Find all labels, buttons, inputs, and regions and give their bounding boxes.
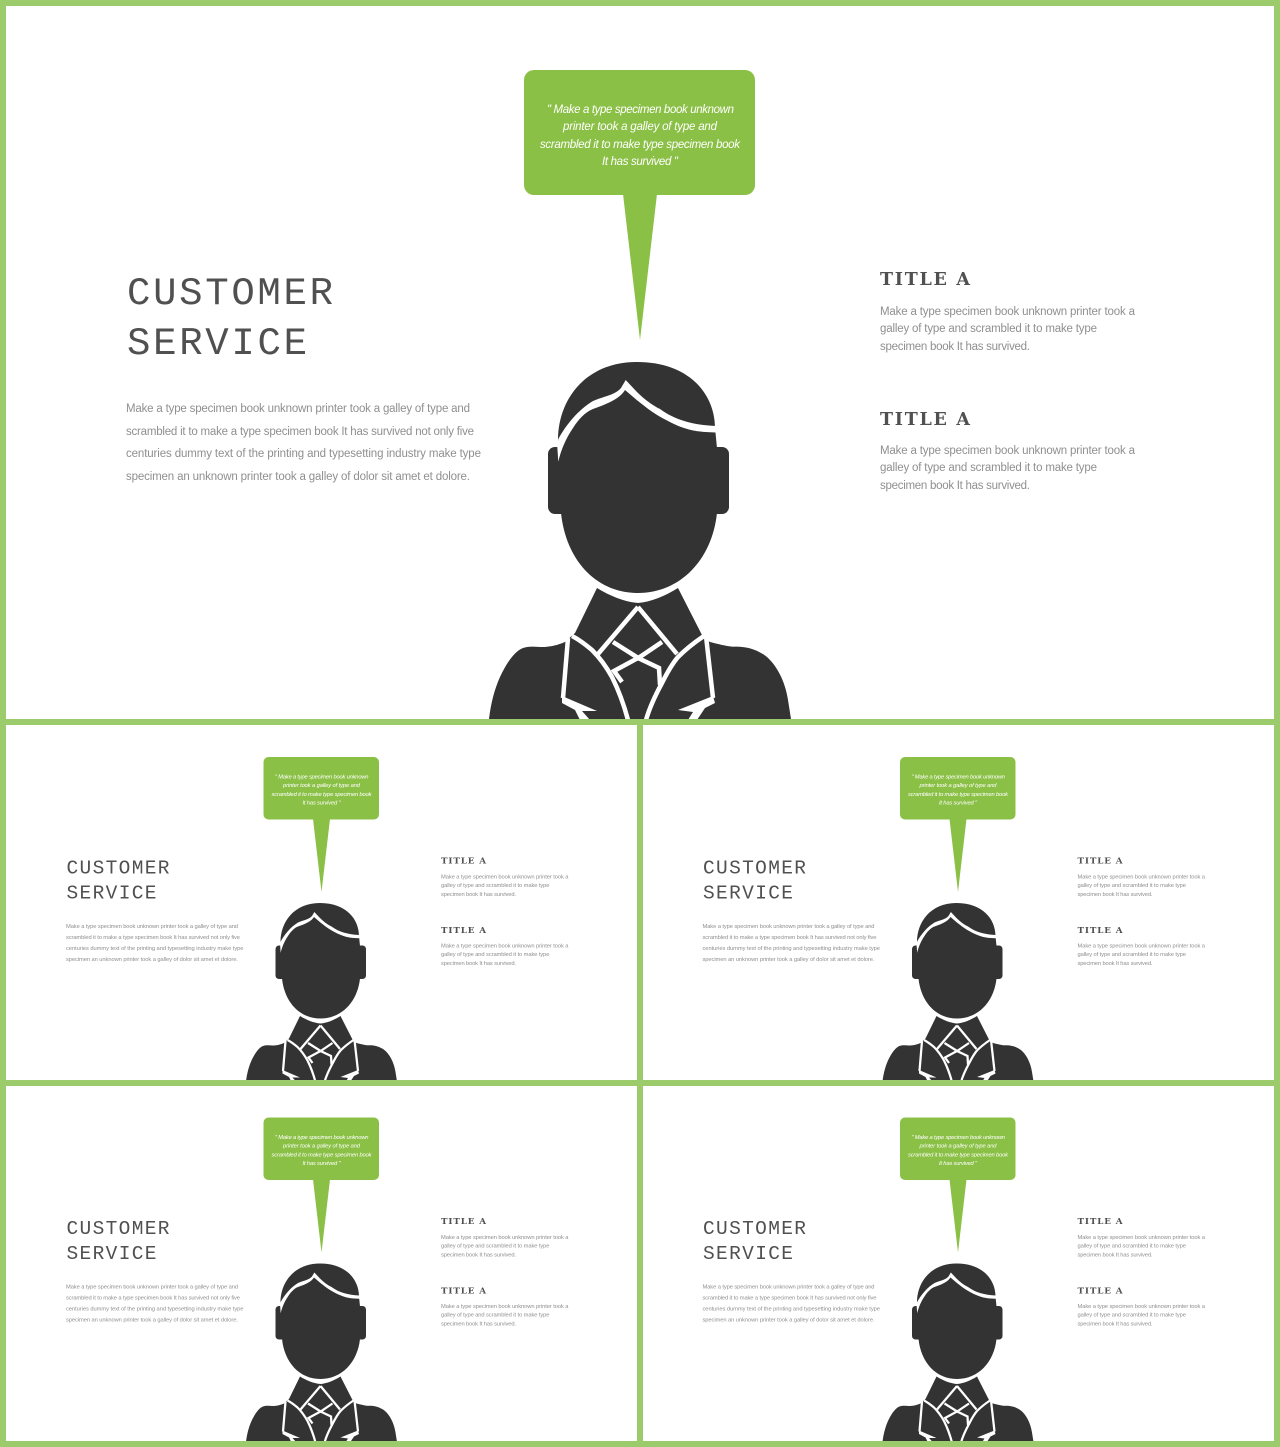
body text: scrambled it to make a type specimen book It has survived not only five	[702, 1296, 876, 1302]
text block: title A first: TITLE A	[880, 270, 970, 290]
text block: title A second: TITLE A	[1078, 1286, 1123, 1296]
text block: title A second: specimen book It has survived.	[880, 480, 1030, 492]
body text: Make a type specimen book unknown printer took a galley of type and	[702, 924, 874, 930]
text block: title A first: specimen book It has survived.	[441, 892, 516, 898]
text block: title A first: Make a type specimen book unknown printer took a	[880, 306, 1136, 318]
body text: centuries dummy text of the printing and typesetting industry make type	[702, 1306, 880, 1312]
text block: title A second: TITLE A	[880, 410, 970, 430]
text block: title A second	[441, 1286, 569, 1328]
icon: business person	[882, 1264, 1034, 1442]
body text: scrambled it to make a type specimen book It has survived not only five	[126, 426, 474, 438]
speech bubble	[900, 1118, 1016, 1252]
heading	[703, 858, 806, 904]
text block: title A second: Make a type specimen book unknown printer took a	[441, 1304, 569, 1310]
body text	[66, 1284, 244, 1324]
body text: Make a type specimen book unknown printer took a galley of type and	[702, 1284, 874, 1290]
heading: SERVICE	[703, 1243, 793, 1265]
speech bubble: " Make a type specimen book unknown	[275, 774, 368, 780]
text block: title A second	[1078, 1286, 1206, 1328]
panel: thumbnail top left	[66, 757, 569, 1082]
body text: specimen an unknown printer took a galley of dolor sit amet et dolore.	[66, 957, 238, 963]
heading: SERVICE	[703, 882, 793, 904]
heading: CUSTOMER	[66, 1218, 170, 1240]
heading	[66, 858, 170, 904]
text block: title A first: TITLE A	[441, 1217, 486, 1227]
text block: title A first: TITLE A	[1078, 856, 1123, 866]
speech bubble: printer took a galley of type and	[918, 783, 997, 789]
speech bubble: scrambled it to make type specimen book	[540, 139, 741, 151]
text block: title A second: Make a type specimen book unknown printer took a	[880, 445, 1136, 457]
text block: title A first: Make a type specimen book unknown printer took a	[441, 874, 569, 880]
text block: title A first: specimen book It has survived.	[1078, 892, 1153, 898]
text block: title A second: galley of type and scrambled it to make type	[1078, 1312, 1186, 1318]
body text	[702, 1284, 880, 1324]
heading: SERVICE	[127, 322, 307, 366]
speech bubble: " Make a type specimen book unknown	[547, 104, 734, 116]
heading	[127, 272, 333, 366]
text block: title A first: galley of type and scrambled it to make type	[441, 883, 550, 889]
body text: scrambled it to make a type specimen book It has survived not only five	[702, 935, 876, 941]
speech bubble: " Make a type specimen book unknown	[275, 1135, 368, 1141]
speech bubble	[264, 1118, 379, 1252]
body text: specimen an unknown printer took a galley of dolor sit amet et dolore.	[702, 1318, 875, 1324]
panel: main slide	[126, 70, 1136, 720]
body text	[702, 924, 880, 963]
speech bubble	[900, 757, 1016, 892]
body text: Make a type specimen book unknown printer took a galley of type and	[66, 924, 238, 930]
text block: title A second: Make a type specimen book unknown printer took a	[441, 944, 569, 950]
speech bubble: It has survived "	[302, 800, 341, 806]
speech bubble	[264, 757, 379, 892]
speech bubble: It has survived "	[302, 1161, 341, 1167]
body text	[66, 924, 244, 963]
speech bubble: scrambled it to make type specimen book	[272, 1152, 373, 1158]
body text	[126, 403, 481, 483]
body text: specimen an unknown printer took a galley of dolor sit amet et dolore.	[702, 957, 875, 963]
text block: title A second: galley of type and scrambled it to make type	[441, 1312, 550, 1318]
body text: specimen an unknown printer took a galley of dolor sit amet et dolore.	[126, 471, 470, 483]
text block: title A first	[1078, 856, 1206, 898]
text block: title A first	[880, 270, 1136, 353]
speech bubble: It has survived "	[939, 1161, 978, 1167]
text block: title A second	[880, 410, 1136, 492]
heading	[66, 1218, 170, 1265]
text block: title A second: TITLE A	[441, 926, 486, 936]
body text: centuries dummy text of the printing and typesetting industry make type	[66, 946, 244, 952]
heading: CUSTOMER	[703, 1218, 806, 1240]
text block: title A second: specimen book It has survived.	[441, 1322, 516, 1328]
text block: title A second: specimen book It has survived.	[441, 961, 516, 967]
text block: title A first: galley of type and scrambled it to make type	[1078, 883, 1186, 889]
heading	[703, 1218, 806, 1265]
text block: title A second: galley of type and scrambled it to make type	[880, 462, 1097, 474]
speech bubble: printer took a galley of type and	[282, 783, 361, 789]
icon: business person	[882, 903, 1034, 1082]
text block: title A second: TITLE A	[441, 1286, 486, 1296]
text block: title A first: TITLE A	[1078, 1217, 1123, 1227]
text block: title A second	[441, 926, 569, 967]
heading: SERVICE	[66, 1243, 156, 1265]
heading: SERVICE	[66, 882, 156, 904]
text block: title A second: Make a type specimen book unknown printer took a	[1078, 1304, 1206, 1310]
speech bubble: printer took a galley of type and	[282, 1144, 361, 1150]
speech bubble: printer took a galley of type and	[918, 1144, 997, 1150]
text block: title A first: Make a type specimen book unknown printer took a	[441, 1235, 569, 1241]
text block: title A second	[1078, 926, 1206, 967]
body text: centuries dummy text of the printing and typesetting industry make type	[126, 448, 481, 460]
text block: title A first: galley of type and scrambled it to make type	[441, 1244, 550, 1250]
text block: title A first	[441, 1217, 569, 1258]
heading: CUSTOMER	[127, 272, 333, 316]
speech bubble: scrambled it to make type specimen book	[908, 1152, 1009, 1158]
panel: thumbnail top right	[702, 757, 1206, 1082]
body text: centuries dummy text of the printing and typesetting industry make type	[66, 1306, 244, 1312]
text block: title A first	[1078, 1217, 1206, 1258]
panel: thumbnail bottom left	[66, 1118, 569, 1442]
heading: CUSTOMER	[703, 858, 806, 880]
body text: Make a type specimen book unknown printer took a galley of type and	[126, 403, 470, 415]
body text: specimen an unknown printer took a galley of dolor sit amet et dolore.	[66, 1318, 238, 1324]
speech bubble: scrambled it to make type specimen book	[272, 792, 373, 798]
body text: scrambled it to make a type specimen book It has survived not only five	[66, 1296, 240, 1302]
text block: title A second: Make a type specimen book unknown printer took a	[1078, 944, 1206, 950]
speech bubble	[524, 70, 755, 340]
speech bubble: " Make a type specimen book unknown	[912, 1135, 1005, 1141]
text block: title A second: galley of type and scrambled it to make type	[1078, 952, 1186, 958]
text block: title A first: specimen book It has survived.	[880, 341, 1030, 353]
speech bubble: " Make a type specimen book unknown	[912, 774, 1005, 780]
text block: title A first: specimen book It has survived.	[441, 1252, 516, 1258]
icon: business person	[246, 903, 397, 1082]
text block: title A second: galley of type and scrambled it to make type	[441, 952, 550, 958]
speech bubble: It has survived "	[602, 156, 679, 168]
text block: title A first: Make a type specimen book unknown printer took a	[1078, 874, 1206, 880]
speech bubble: printer took a galley of type and	[562, 121, 718, 133]
heading: CUSTOMER	[66, 858, 170, 880]
text block: title A first: specimen book It has survived.	[1078, 1252, 1153, 1258]
speech bubble: It has survived "	[939, 800, 978, 806]
text block: title A second: TITLE A	[1078, 926, 1123, 936]
text block: title A first: Make a type specimen book unknown printer took a	[1078, 1235, 1206, 1241]
text block: title A second: specimen book It has survived.	[1078, 1322, 1153, 1328]
panel: thumbnail bottom right	[702, 1118, 1206, 1442]
speech bubble: scrambled it to make type specimen book	[908, 792, 1009, 798]
text block: title A first: TITLE A	[441, 856, 486, 866]
icon: business person	[489, 362, 791, 720]
body text: Make a type specimen book unknown printer took a galley of type and	[66, 1284, 238, 1290]
body text: scrambled it to make a type specimen book It has survived not only five	[66, 935, 240, 941]
text block: title A second: specimen book It has survived.	[1078, 961, 1153, 967]
body text: centuries dummy text of the printing and typesetting industry make type	[702, 946, 880, 952]
text block: title A first: galley of type and scrambled it to make type	[1078, 1244, 1186, 1250]
icon: business person	[246, 1264, 397, 1442]
text block: title A first	[441, 856, 569, 898]
text block: title A first: galley of type and scrambled it to make type	[880, 323, 1097, 335]
